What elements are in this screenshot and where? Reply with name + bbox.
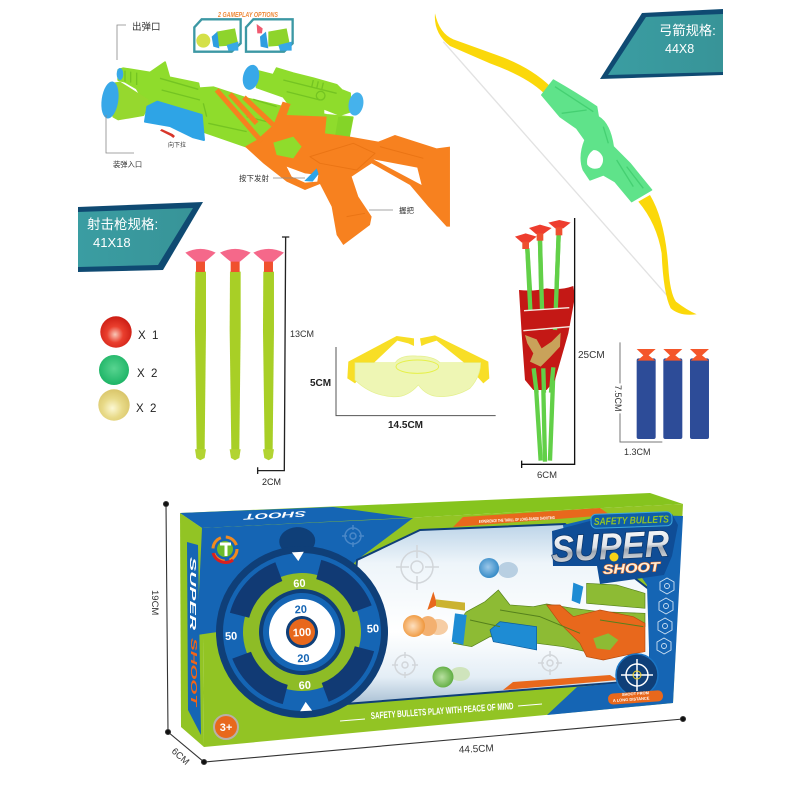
super shoot logo: [550, 512, 678, 584]
foam darts: [620, 342, 709, 442]
red ball: [100, 316, 132, 348]
bow grip: [542, 80, 652, 202]
banner: bow specification: 44X8: [665, 42, 694, 56]
banner: gun specification: [78, 202, 203, 272]
scene reticles: [342, 525, 562, 678]
slogan: SAFETY BULLETS PLAY WITH PEACE OF MIND: [370, 701, 514, 722]
gun callouts: 出弹口: [132, 21, 161, 33]
target dark segments: [227, 557, 377, 707]
toy bow: [435, 13, 697, 315]
target inner blue ring: [257, 587, 347, 677]
orange distance pill: SHOOT FROM: [622, 690, 650, 697]
gun callouts: 握把: [399, 205, 414, 215]
box side face: [180, 513, 204, 747]
printed scope: [572, 583, 645, 608]
dart 3: [690, 349, 709, 439]
super shoot logo: SUPER: [550, 523, 671, 570]
safety glasses: [336, 335, 496, 416]
target outer ring: [212, 542, 392, 722]
dart dimension lines: [620, 342, 662, 442]
quiver body: [519, 235, 575, 393]
target hook: [279, 526, 316, 556]
gameplay options heading: 2 GAMEPLAY OPTIONS: [217, 12, 278, 19]
gun pump handle: [145, 102, 204, 140]
target scores: 20: [297, 653, 310, 665]
dart height label: 7.5CM: [613, 385, 623, 412]
small target badge: [616, 654, 658, 696]
box side face: SUPER: [188, 557, 197, 631]
green ball with trail: [432, 666, 470, 688]
printed muzzle: [452, 613, 467, 645]
box side face: SHOOT: [189, 638, 198, 709]
arrow shafts: [527, 235, 559, 462]
arrow 2: [220, 249, 251, 460]
yellow ball: [98, 389, 130, 421]
gun callouts: 向下拉: [168, 141, 186, 149]
orange top strip: [453, 508, 610, 527]
glasses dimension lines: [336, 347, 496, 416]
glasses arms: [347, 335, 489, 383]
ball quantities: X 1: [138, 330, 158, 342]
printed pump: [490, 622, 537, 650]
glasses lenses: [355, 356, 481, 397]
banner: gun specification: 射击枪规格:: [87, 216, 158, 232]
box top face blue section: [180, 507, 413, 528]
brand logo: [213, 537, 237, 562]
super shoot logo: SAFETY BULLETS: [594, 514, 669, 528]
feature icons: [657, 578, 674, 654]
banner: bow specification: [600, 9, 723, 79]
gun callouts: 装弹入口: [113, 160, 142, 169]
bowstring: [443, 42, 678, 308]
quiver dimension lines: [522, 218, 575, 468]
box width label: 44.5CM: [459, 743, 494, 756]
arrow 1: [185, 249, 216, 460]
arrow width label: 2CM: [262, 477, 281, 487]
sucker arrows with dimensions: [185, 237, 289, 474]
age badge: [214, 715, 238, 739]
green ball: [99, 355, 129, 385]
printed stock: [547, 605, 645, 660]
gameplay option thumbnails: [194, 19, 293, 52]
eagle emblem: [525, 333, 561, 367]
bow limbs: [435, 13, 697, 315]
orange distance pill: [608, 690, 663, 705]
orange distance pill: A LONG DISTANCE: [613, 695, 650, 703]
arrow 3: [253, 249, 284, 460]
banner: gun specification: 41X18: [93, 235, 131, 250]
box height label: 19CM: [149, 590, 160, 615]
arrow dimension lines: [258, 237, 289, 474]
blue top left panel: [197, 518, 413, 635]
gun stock and grip: [217, 90, 450, 245]
gun leader lines: [106, 25, 393, 210]
product box: [180, 493, 683, 747]
box dimension lines: [164, 502, 686, 764]
gun scope: [241, 63, 365, 140]
dart 1: [637, 349, 656, 439]
slogan: [340, 701, 542, 722]
toy gun: [99, 62, 450, 245]
gun details: [125, 71, 280, 132]
printed gun body: [453, 590, 645, 653]
glasses width label: 14.5CM: [388, 420, 423, 431]
target white field: [267, 597, 337, 667]
target green ring: [240, 570, 364, 694]
dart 2: [663, 349, 682, 439]
orange ball with trail: [403, 615, 448, 637]
target scores: [222, 574, 382, 696]
box front face: [202, 504, 683, 747]
super shoot logo: SHOOT: [602, 559, 661, 577]
gun callouts: 按下发射: [239, 173, 269, 183]
gun printed on the box: [427, 583, 645, 660]
blue ball with trail: [479, 558, 518, 578]
target arrows: [292, 552, 304, 561]
scene window: [345, 524, 650, 704]
top flap brand text: SHOOT: [242, 509, 306, 521]
box top face: [180, 493, 683, 528]
ball quantities: X 2: [137, 368, 157, 380]
age badge: 3+: [220, 722, 232, 734]
banner: bow specification: 弓箭规格:: [659, 22, 716, 38]
glasses height label: 5CM: [310, 378, 331, 389]
quiver height label: 25CM: [578, 350, 605, 361]
target scores: 50: [225, 630, 238, 643]
ball quantities: X 2: [136, 403, 156, 415]
orange top strip: EXPERIENCE THE THRILL OF LONG-RANGE SHOOTING: [479, 515, 555, 524]
suction tips: [515, 220, 571, 249]
target scores: 100: [293, 627, 312, 639]
ball quantities: [98, 316, 158, 421]
quiver with three arrows: [515, 218, 575, 468]
pull direction arrow: [160, 129, 175, 138]
target scores: 60: [298, 680, 311, 692]
box depth label: 6CM: [169, 746, 191, 768]
gun muzzle: [99, 68, 147, 120]
printed sucker dart: [427, 592, 465, 611]
right blue panel: [547, 514, 683, 715]
target scores: 50: [367, 623, 379, 636]
target scores: 60: [293, 578, 306, 590]
target bullseye: [285, 615, 319, 649]
gun callouts: [113, 21, 414, 215]
quiver width label: 6CM: [537, 470, 557, 481]
dart width label: 1.3CM: [624, 447, 651, 457]
orange bottom strip: [503, 675, 618, 690]
arrow height label: 13CM: [290, 329, 314, 339]
gun body: [118, 62, 353, 157]
target scores: 20: [294, 604, 307, 616]
dartboard target: [211, 523, 392, 722]
